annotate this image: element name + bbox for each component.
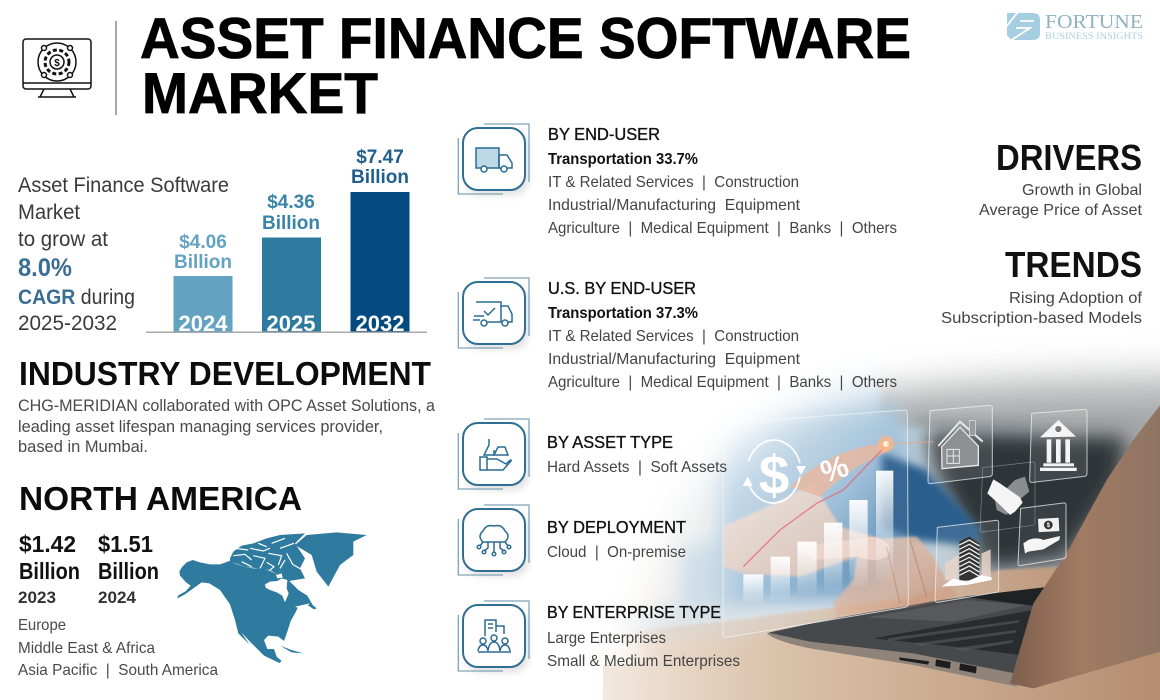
panel: by end-user: BY END-USER: [548, 124, 660, 144]
icon: hand holding assets: [480, 439, 511, 470]
drivers block: DRIVERS: [996, 137, 1142, 178]
regional values: 2024: [98, 588, 137, 607]
building icon: [942, 537, 992, 587]
regional values: Billion: [19, 558, 80, 584]
panel: U.S. by end-user: Agriculture | Medical Equipment | Banks | Others: [548, 374, 897, 391]
bar chart: market size: Billion: [262, 213, 320, 234]
panel: by deployment: [458, 505, 686, 576]
icon: buildings and people: [478, 620, 511, 652]
heading: north america: NORTH AMERICA: [19, 480, 302, 517]
CAGR text block: CAGR during: [18, 286, 135, 309]
panel: U.S. by end-user: Industrial/Manufacturing Equipment: [548, 351, 801, 368]
house icon: [938, 421, 983, 469]
other regions list: Europe: [18, 617, 66, 634]
regional values: [18, 531, 159, 607]
map: North America: [177, 532, 367, 663]
bar chart: market size: Billion: [351, 167, 409, 188]
logo: Fortune Business Insights: FORTUNE: [1045, 12, 1143, 33]
panel: U.S. by end-user: IT & Related Services | Construction: [548, 328, 799, 345]
trends block: TRENDS: [1005, 244, 1142, 285]
panel: U.S. by end-user: [458, 278, 897, 391]
regional values: $1.42: [19, 531, 76, 557]
bar chart: market size: 2032: [356, 311, 404, 336]
hand with money icon: [1023, 518, 1060, 553]
laptop base: [766, 633, 1018, 686]
dollar cycle icon: %: [816, 449, 853, 490]
panel: U.S. by end-user: Transportation 37.3%: [548, 305, 698, 322]
bar chart: market size: $4.06: [179, 232, 227, 253]
icon: monitor with gear and dollar: $: [54, 58, 60, 69]
title: ASSET FINANCE SOFTWARE: [140, 7, 911, 71]
panel: by end-user: [458, 124, 897, 237]
panel: by end-user: Transportation 33.7%: [548, 151, 698, 168]
trends block: Subscription-based Models: [941, 310, 1142, 327]
panel: by asset type: Hard Assets | Soft Assets: [547, 459, 727, 476]
text: industry development body: [18, 397, 436, 456]
hand: [723, 483, 957, 615]
glass panels: [723, 410, 908, 637]
panel: by enterprise type: Large Enterprises: [547, 630, 666, 647]
trends block: Rising Adoption of: [1009, 290, 1143, 307]
logo: Fortune Business Insights: [1006, 12, 1143, 41]
regional values: $1.51: [98, 531, 153, 557]
panel: by enterprise type: BY ENTERPRISE TYPE: [547, 602, 721, 622]
bar chart: market size: [146, 147, 427, 336]
drivers block: Growth in Global: [1022, 182, 1142, 199]
trends block: [941, 244, 1143, 327]
icon: cloud network: [477, 526, 511, 556]
background photo: hand pointing at laptop with finance icons: [593, 327, 1160, 700]
CAGR text block: 8.0%: [18, 254, 72, 282]
title: MARKET: [142, 62, 378, 126]
panel: by asset type: BY ASSET TYPE: [547, 432, 673, 452]
panel: by enterprise type: Small & Medium Enterprises: [547, 653, 740, 670]
text: industry development body: CHG-MERIDIAN collaborated with OPC Asset Solutions, a: [18, 397, 436, 415]
hand with money icon: $: [1047, 523, 1051, 529]
CAGR text block: 2025-2032: [18, 312, 117, 335]
panel: by end-user: Industrial/Manufacturing Equipment: [548, 197, 801, 214]
regional values: 2023: [18, 588, 56, 607]
panel: by deployment: BY DEPLOYMENT: [547, 517, 686, 537]
other regions list: Asia Pacific | South America: [18, 662, 218, 679]
text: industry development body: based in Mumbai.: [18, 438, 148, 456]
bar chart: market size: Billion: [174, 252, 232, 273]
CAGR text block: [18, 174, 229, 335]
text: industry development body: leading asset lifespan managing services provider,: [18, 418, 383, 436]
other regions list: Middle East & Africa: [18, 640, 155, 657]
laptop lid: [1010, 397, 1160, 688]
heading: industry development: INDUSTRY DEVELOPMENT: [19, 355, 431, 392]
panel: by deployment: Cloud | On-premise: [547, 544, 686, 561]
bar chart: market size: 2024: [179, 311, 228, 336]
bank icon: [1040, 420, 1077, 471]
CAGR text block: Asset Finance Software: [18, 174, 229, 197]
bar chart: market size: $7.47: [356, 147, 404, 168]
bar chart: market size: 2025: [267, 311, 315, 336]
chart bars in glass: [743, 471, 893, 604]
panel: U.S. by end-user: U.S. BY END-USER: [548, 278, 696, 298]
panel: by end-user: Agriculture | Medical Equipment | Banks | Others: [548, 220, 897, 237]
dollar cycle icon: [743, 440, 853, 506]
drivers block: [979, 137, 1143, 219]
bar chart: market size: $4.36: [267, 192, 315, 213]
logo: Fortune Business Insights: BUSINESS INSIGHTS: [1045, 31, 1143, 41]
divider: [115, 21, 117, 115]
handshake icon: [987, 477, 1029, 515]
panel: by end-user: IT & Related Services | Construction: [548, 174, 799, 191]
panel: by asset type: [458, 419, 727, 490]
red trend line: [743, 447, 885, 567]
regional values: Billion: [98, 558, 159, 584]
other regions list: [18, 617, 218, 679]
icon: delivery truck with check: [473, 302, 512, 326]
CAGR text block: Market: [18, 201, 80, 224]
icon: delivery truck: [476, 148, 512, 172]
panel: by enterprise type: [458, 601, 740, 672]
CAGR text block: to grow at: [18, 228, 108, 251]
dollar cycle icon: $: [759, 444, 789, 506]
icon: monitor with gear and dollar: [23, 39, 91, 97]
drivers block: Average Price of Asset: [979, 202, 1143, 219]
